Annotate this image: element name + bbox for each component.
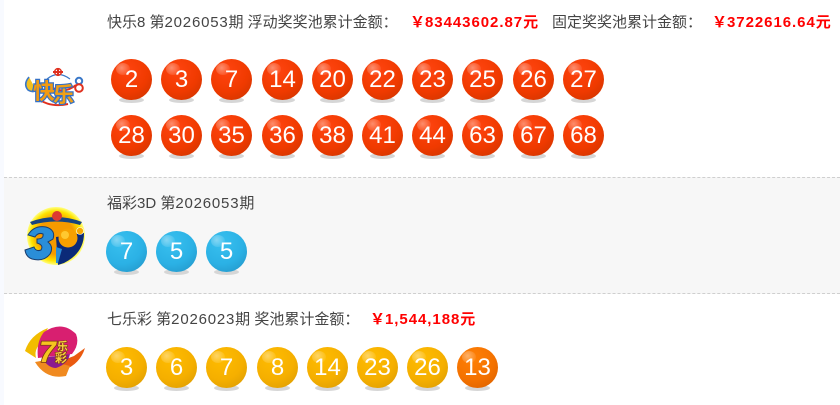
number balls: 七乐彩: 8 <box>271 354 284 381</box>
number balls: 快乐8 row 2: 44 <box>419 122 446 149</box>
heading: 快乐8 draw info: 快乐8 第2026053期 浮动奖奖池累计金额： <box>107 14 398 31</box>
number balls: 七乐彩: 6 <box>170 354 183 381</box>
icon: 快乐8 logo: 快 <box>33 79 55 104</box>
icon: 七乐彩 logo: 彩 <box>55 351 67 365</box>
number balls: 快乐8 row 2: 41 <box>369 122 396 149</box>
icon: 七乐彩 logo: 7 <box>39 336 57 369</box>
number balls: 快乐8 row 1: 27 <box>570 66 597 93</box>
number balls: 快乐8 row 2: 36 <box>269 122 296 149</box>
heading: 七乐彩 draw info: ￥1,544,188元 <box>370 311 475 328</box>
number balls: 快乐8 row 1: 23 <box>419 66 446 93</box>
number balls: 七乐彩: 14 <box>314 354 341 381</box>
number balls: 快乐8 row 1: 2 <box>125 66 138 93</box>
icon: 福彩3D logo <box>24 207 85 265</box>
number balls: 快乐8 row 1: 3 <box>175 66 188 93</box>
heading: 福彩3D draw info: 福彩3D 第2026053期 <box>107 195 254 212</box>
heading: 七乐彩 draw info <box>107 311 475 328</box>
number balls: 快乐8 row 1 <box>111 59 604 103</box>
number balls: 快乐8 row 2 <box>111 115 604 159</box>
number balls: 快乐8 row 2: 67 <box>520 122 547 149</box>
icon: 七乐彩 logo <box>25 326 85 377</box>
number balls: 快乐8 row 2: 68 <box>570 122 597 149</box>
number balls: 快乐8 row 1: 25 <box>469 66 496 93</box>
heading: 快乐8 draw info: ￥3722616.64元 <box>712 14 831 31</box>
left edge strip <box>0 0 4 405</box>
number balls: 快乐8 row 2: 28 <box>118 122 145 149</box>
number balls: 快乐8 row 2: 63 <box>469 122 496 149</box>
number balls: 七乐彩: 7 <box>220 354 233 381</box>
number balls: 快乐8 row 1: 22 <box>369 66 396 93</box>
number balls: 快乐8 row 2: 35 <box>218 122 245 149</box>
panel: 福彩3D <box>24 195 254 275</box>
heading: 快乐8 draw info <box>107 14 831 31</box>
panel: 七乐彩 <box>25 311 498 391</box>
number balls: 福彩3D: 7 <box>120 238 133 265</box>
number balls: 福彩3D: 5 <box>170 238 183 265</box>
number balls: 快乐8 row 2: 38 <box>319 122 346 149</box>
number balls: 福彩3D <box>106 231 247 275</box>
icon: 七乐彩 logo: 乐 <box>57 340 68 353</box>
panel: 快乐8 <box>24 14 831 159</box>
number balls: 快乐8 row 1: 7 <box>225 66 238 93</box>
heading: 快乐8 draw info: 固定奖奖池累计金额： <box>552 14 702 31</box>
number balls: 七乐彩: 13 <box>464 354 491 381</box>
number balls: 七乐彩 <box>106 347 498 391</box>
number balls: 快乐8 row 1: 20 <box>319 66 346 93</box>
heading: 快乐8 draw info: ￥83443602.87元 <box>410 14 538 31</box>
heading: 七乐彩 draw info: 七乐彩 第2026023期 奖池累计金额： <box>107 311 359 328</box>
number balls: 快乐8 row 2: 30 <box>168 122 195 149</box>
number balls: 快乐8 row 1: 26 <box>520 66 547 93</box>
number balls: 七乐彩: 26 <box>414 354 441 381</box>
number balls: 七乐彩: 23 <box>364 354 391 381</box>
number balls: 七乐彩: 3 <box>120 354 133 381</box>
number balls: 福彩3D: 5 <box>220 238 233 265</box>
panel: 3D band <box>4 177 840 294</box>
icon: 快乐8 logo: 乐 <box>53 84 74 107</box>
number balls: 快乐8 row 1: 14 <box>269 66 296 93</box>
icon: 快乐8 logo <box>24 68 84 107</box>
